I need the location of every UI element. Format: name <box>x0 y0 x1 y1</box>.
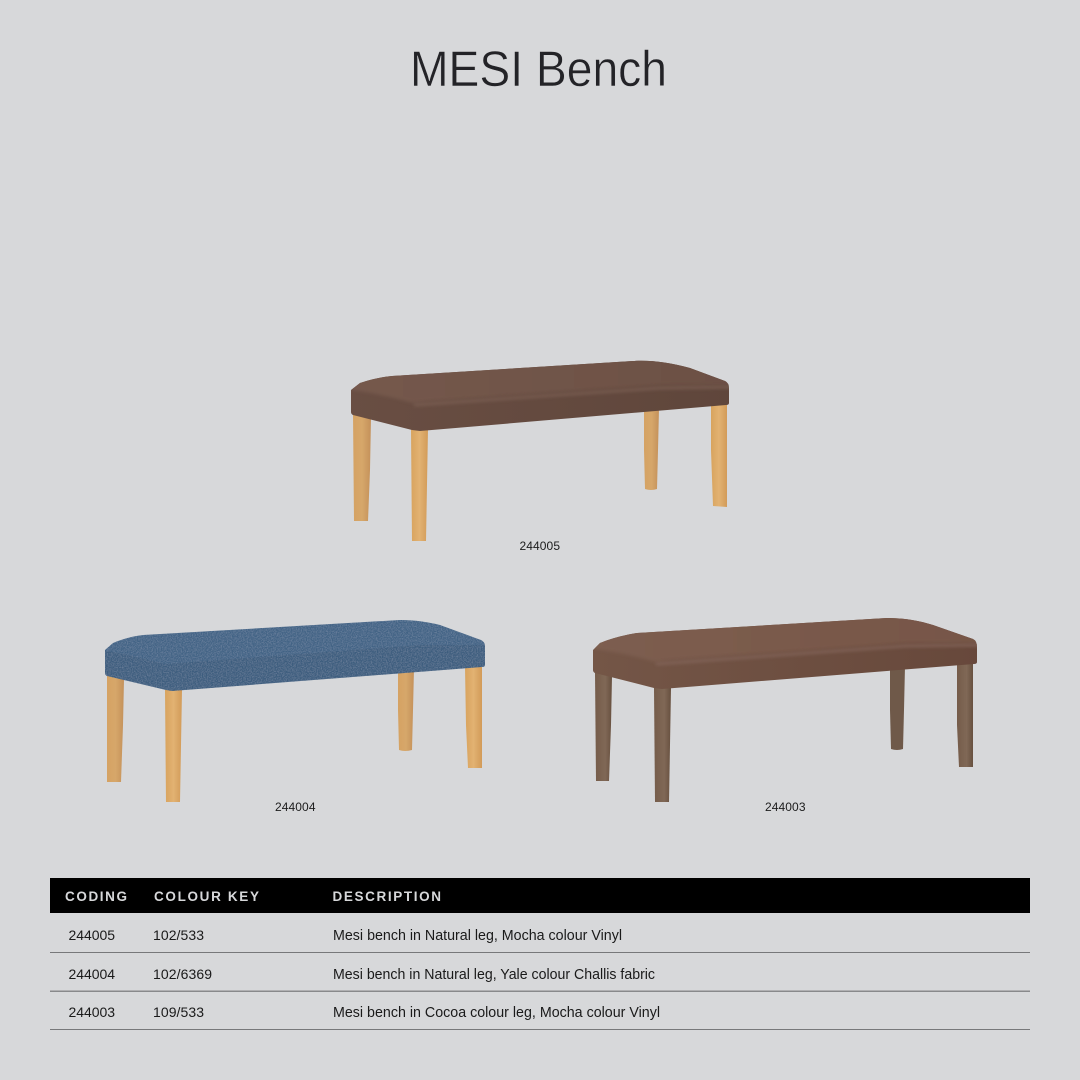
row 244003: 109/533 <box>153 1004 204 1020</box>
row 244004: Mesi bench in Natural leg, Yale colour Challis fabric <box>333 967 655 983</box>
title: MESI Bench <box>410 41 667 97</box>
row 244004: 102/6369 <box>153 966 212 982</box>
caption 244005: 244005 <box>520 539 560 553</box>
table header: DESCRIPTION <box>332 889 441 904</box>
seat cushion <box>105 620 485 691</box>
bench 244003: cocoa leg, mocha vinyl <box>588 612 983 802</box>
row 244005: 102/533 <box>153 927 204 943</box>
row 244005 <box>50 927 1030 953</box>
caption 244003: 244003 <box>765 800 806 814</box>
table header: CODING <box>65 889 127 904</box>
row 244003 <box>50 1004 1030 1030</box>
row 244004 <box>50 966 1030 992</box>
legs <box>107 665 482 802</box>
row 244003: Mesi bench in Cocoa colour leg, Mocha colour Vinyl <box>333 1005 660 1021</box>
seat cushion <box>593 618 977 689</box>
seat cushion <box>351 360 729 431</box>
legs <box>353 403 727 541</box>
bench 244004: natural leg, yale fabric <box>100 615 490 802</box>
legs <box>595 663 973 802</box>
bench 244005: natural leg, mocha vinyl <box>345 355 735 541</box>
row 244004: 244004 <box>68 966 115 982</box>
table header: COLOUR KEY <box>154 889 259 904</box>
table header <box>50 878 1030 913</box>
caption 244004: 244004 <box>275 800 316 814</box>
product table <box>50 878 1030 1030</box>
row 244005: Mesi bench in Natural leg, Mocha colour Vinyl <box>333 928 622 944</box>
row 244003: 244003 <box>68 1004 115 1020</box>
row 244005: 244005 <box>68 927 115 943</box>
